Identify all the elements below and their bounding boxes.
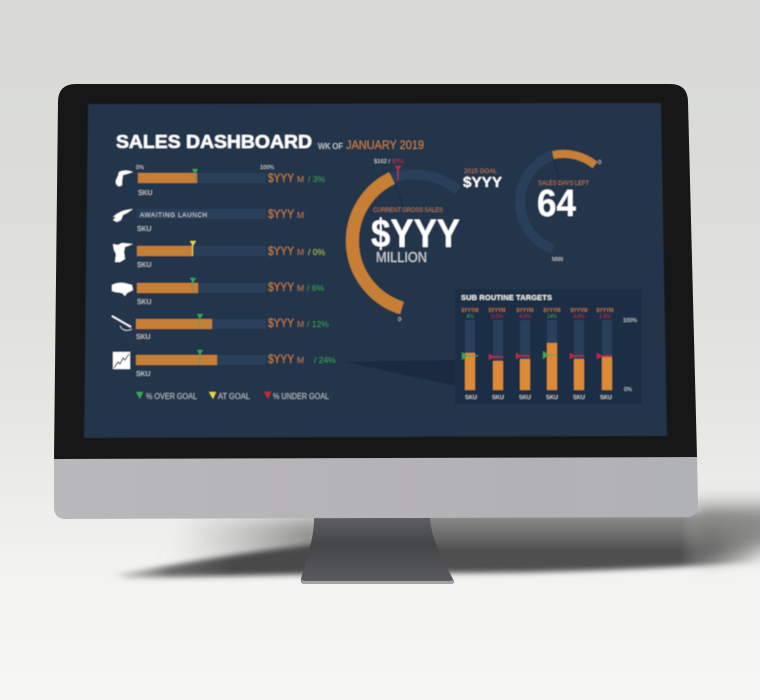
column 5: $YYYM [571, 308, 587, 314]
row 3 [113, 241, 325, 269]
column 3: SKU [519, 395, 531, 401]
row 6: M [297, 355, 304, 365]
gauge: current gross sales [352, 159, 460, 323]
row 4: / 6% [307, 283, 324, 293]
column 3: $YYYM [517, 308, 533, 314]
column 4 [543, 308, 560, 401]
panel: sub routine targets [455, 289, 642, 404]
row 6: $YYY [268, 354, 294, 366]
icon: line chart [113, 352, 130, 369]
row 1: M [297, 174, 304, 184]
row 3: / 0% [308, 247, 325, 257]
panel: sub routine targets: SUB ROUTINE TARGETS [461, 293, 552, 302]
row 5: M [297, 319, 304, 329]
column 1: SKU [465, 395, 477, 401]
column 2 [489, 308, 505, 401]
column 6: 1.5% [599, 314, 611, 320]
row 1: $YYY [268, 173, 294, 185]
monitor stand [301, 518, 454, 584]
row 3: M [297, 247, 304, 257]
column 3 [516, 308, 533, 401]
column 2: $YYYM [489, 308, 505, 314]
legend: % UNDER GOAL [273, 392, 329, 401]
row 4: M [297, 283, 304, 293]
column 1: $YYYM [462, 308, 478, 314]
column 1: 4% [466, 314, 474, 320]
column 6: SKU [600, 395, 612, 401]
column 2: 0.0% [491, 314, 503, 320]
gauge: current gross sales: 0 [398, 317, 401, 323]
gauge: sales days left [520, 154, 601, 263]
icon: applicator [112, 283, 133, 296]
column 1 [462, 308, 478, 401]
legend: % OVER GOAL [146, 392, 197, 401]
gauge: sales days left: NNN [552, 257, 563, 263]
row 2: $YYY [268, 209, 294, 221]
callout: 2015 goal: $YYY [463, 174, 502, 191]
row 1 [116, 169, 325, 197]
row 3: SKU [137, 262, 151, 269]
gauge: current gross sales: $YYY [371, 212, 460, 256]
axis labels: 100% [623, 318, 637, 324]
column 6: $YYYM [597, 308, 613, 314]
icon: spray gun [113, 243, 133, 262]
gauge: current gross sales: CURRENT GROSS SALES [373, 208, 443, 214]
row 2: AWAITING LAUNCH [140, 212, 207, 219]
title: SALES DASHBOARD [116, 131, 312, 152]
column 6 [597, 308, 613, 401]
callout: 2015 goal: 2015 GOAL [464, 168, 497, 175]
axis labels: 0% [624, 387, 632, 393]
row 2: M [297, 210, 304, 220]
gauge: current gross sales: $162 / [374, 159, 391, 165]
title [116, 131, 424, 152]
row 5 [112, 314, 329, 341]
icon: glue gun [116, 170, 133, 186]
title: WK OF [318, 142, 343, 151]
row 6 [113, 350, 336, 378]
row 1: SKU [138, 190, 152, 197]
legend: AT GOAL [218, 392, 251, 401]
row 4: SKU [137, 299, 151, 306]
scale labels [136, 165, 274, 171]
gauge: sales days left: SALES DAYS LEFT [538, 181, 589, 187]
title: JANUARY 2019 [346, 138, 424, 152]
row 4 [112, 278, 324, 306]
row 5: / 12% [307, 319, 329, 329]
row 2 [113, 209, 304, 233]
column 4: $YYYM [544, 308, 560, 314]
scale labels: 100% [260, 165, 274, 171]
icon: wand [112, 316, 132, 330]
column 5: SKU [573, 395, 585, 401]
column 5 [570, 308, 587, 401]
column 4: SKU [546, 395, 558, 401]
row 4: $YYY [268, 282, 294, 294]
column 2: SKU [492, 395, 504, 401]
legend [136, 392, 329, 401]
row 5: SKU [136, 334, 150, 341]
column 4: 14% [547, 314, 558, 320]
row 6: / 24% [314, 355, 336, 365]
callout connector [345, 360, 455, 386]
dashboard screen [84, 103, 667, 438]
column 3: 4.0% [519, 314, 531, 320]
axis labels [623, 318, 637, 393]
gauge: sales days left: 64 [537, 183, 576, 225]
monitor body [54, 84, 698, 519]
gauge: sales days left: 0 [598, 160, 601, 166]
gauge: current gross sales: MILLION [376, 249, 427, 266]
row 1: / 3% [308, 174, 325, 184]
row 6: SKU [136, 371, 150, 378]
scale labels: 0% [136, 165, 144, 171]
icon: nozzle [113, 209, 133, 222]
row 5: $YYY [268, 318, 294, 330]
desk shadow [112, 505, 760, 578]
gauge: current gross sales: $7% [392, 159, 404, 165]
row 2: SKU [137, 226, 151, 233]
column 5: 4.8% [573, 314, 585, 320]
row 3: $YYY [268, 246, 294, 258]
